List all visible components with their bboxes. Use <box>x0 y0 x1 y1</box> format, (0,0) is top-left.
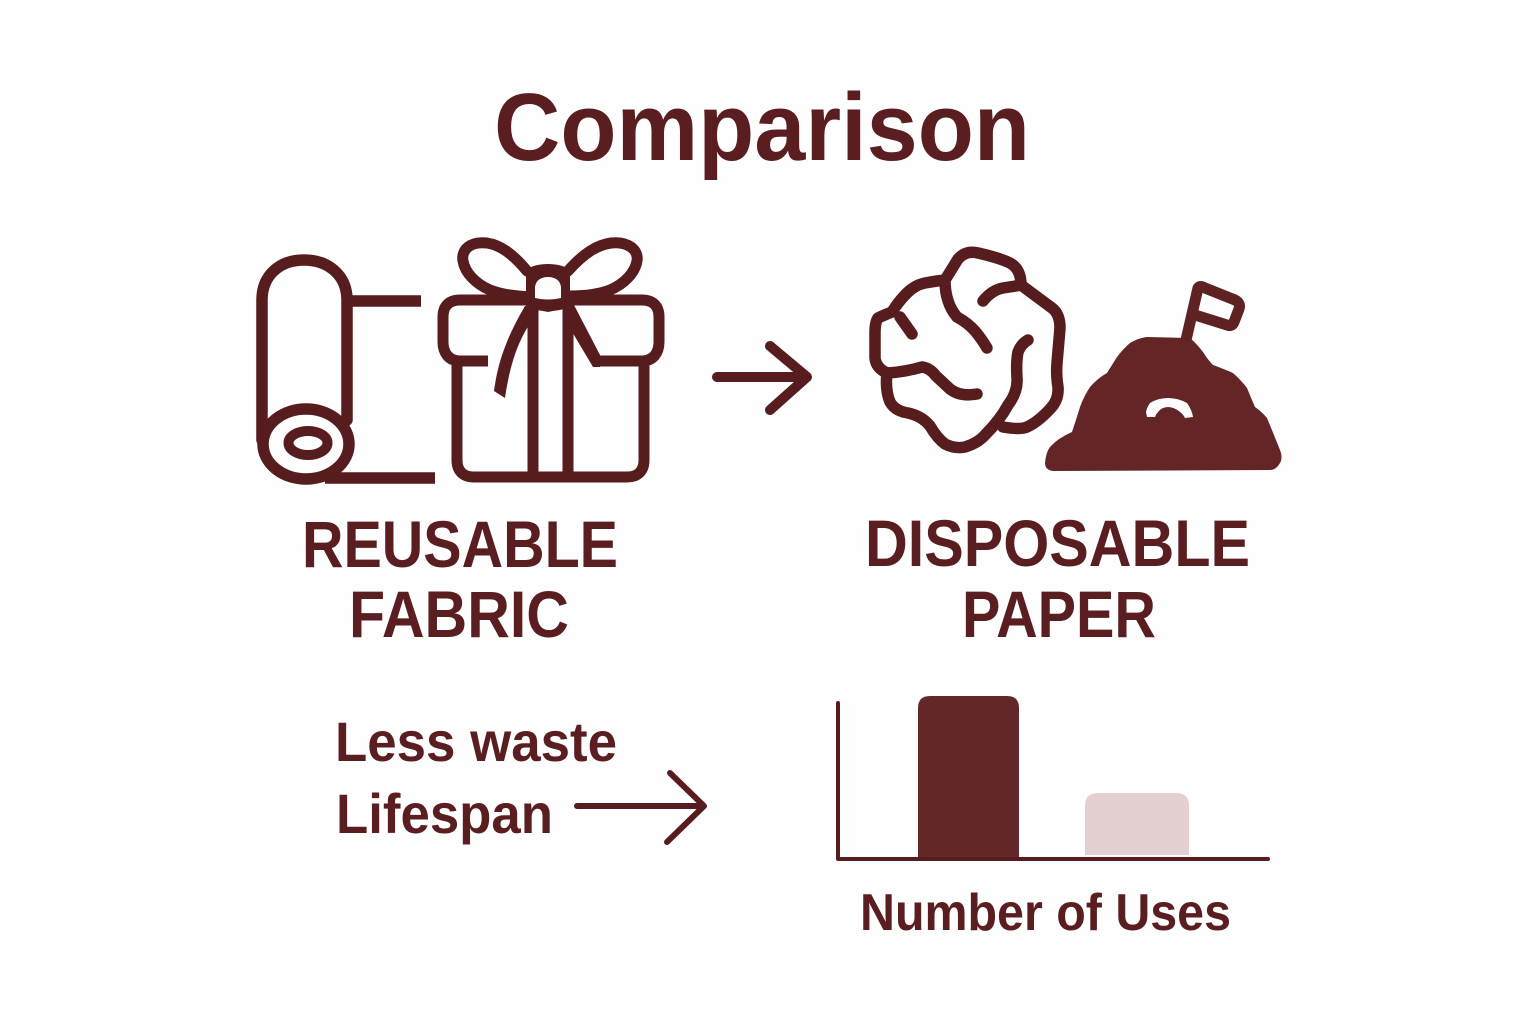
bar chart <box>838 696 1268 860</box>
icon: gift box <box>443 243 659 477</box>
label: disposable paper: PAPER <box>962 577 1156 651</box>
chart axes <box>838 703 1268 859</box>
arrow: reusable to disposable <box>717 346 807 410</box>
label: disposable paper <box>865 506 1250 651</box>
label: reusable fabric: REUSABLE <box>302 507 618 581</box>
icon: fabric roll <box>262 260 435 479</box>
icon: crumpled paper <box>875 252 1060 448</box>
title: Comparison <box>494 74 1030 181</box>
text: less waste: Less waste <box>335 710 617 773</box>
label: disposable paper: DISPOSABLE <box>865 506 1250 580</box>
bar: disposable paper <box>1085 793 1189 855</box>
text: lifespan: Lifespan <box>336 782 553 845</box>
bar: reusable fabric <box>918 696 1019 860</box>
label: reusable fabric <box>302 507 618 651</box>
arrow: lifespan to chart <box>577 773 704 842</box>
icon: landfill mound with flag <box>1045 286 1282 471</box>
chart label: Number of Uses <box>860 884 1231 942</box>
label: reusable fabric: FABRIC <box>349 577 569 651</box>
